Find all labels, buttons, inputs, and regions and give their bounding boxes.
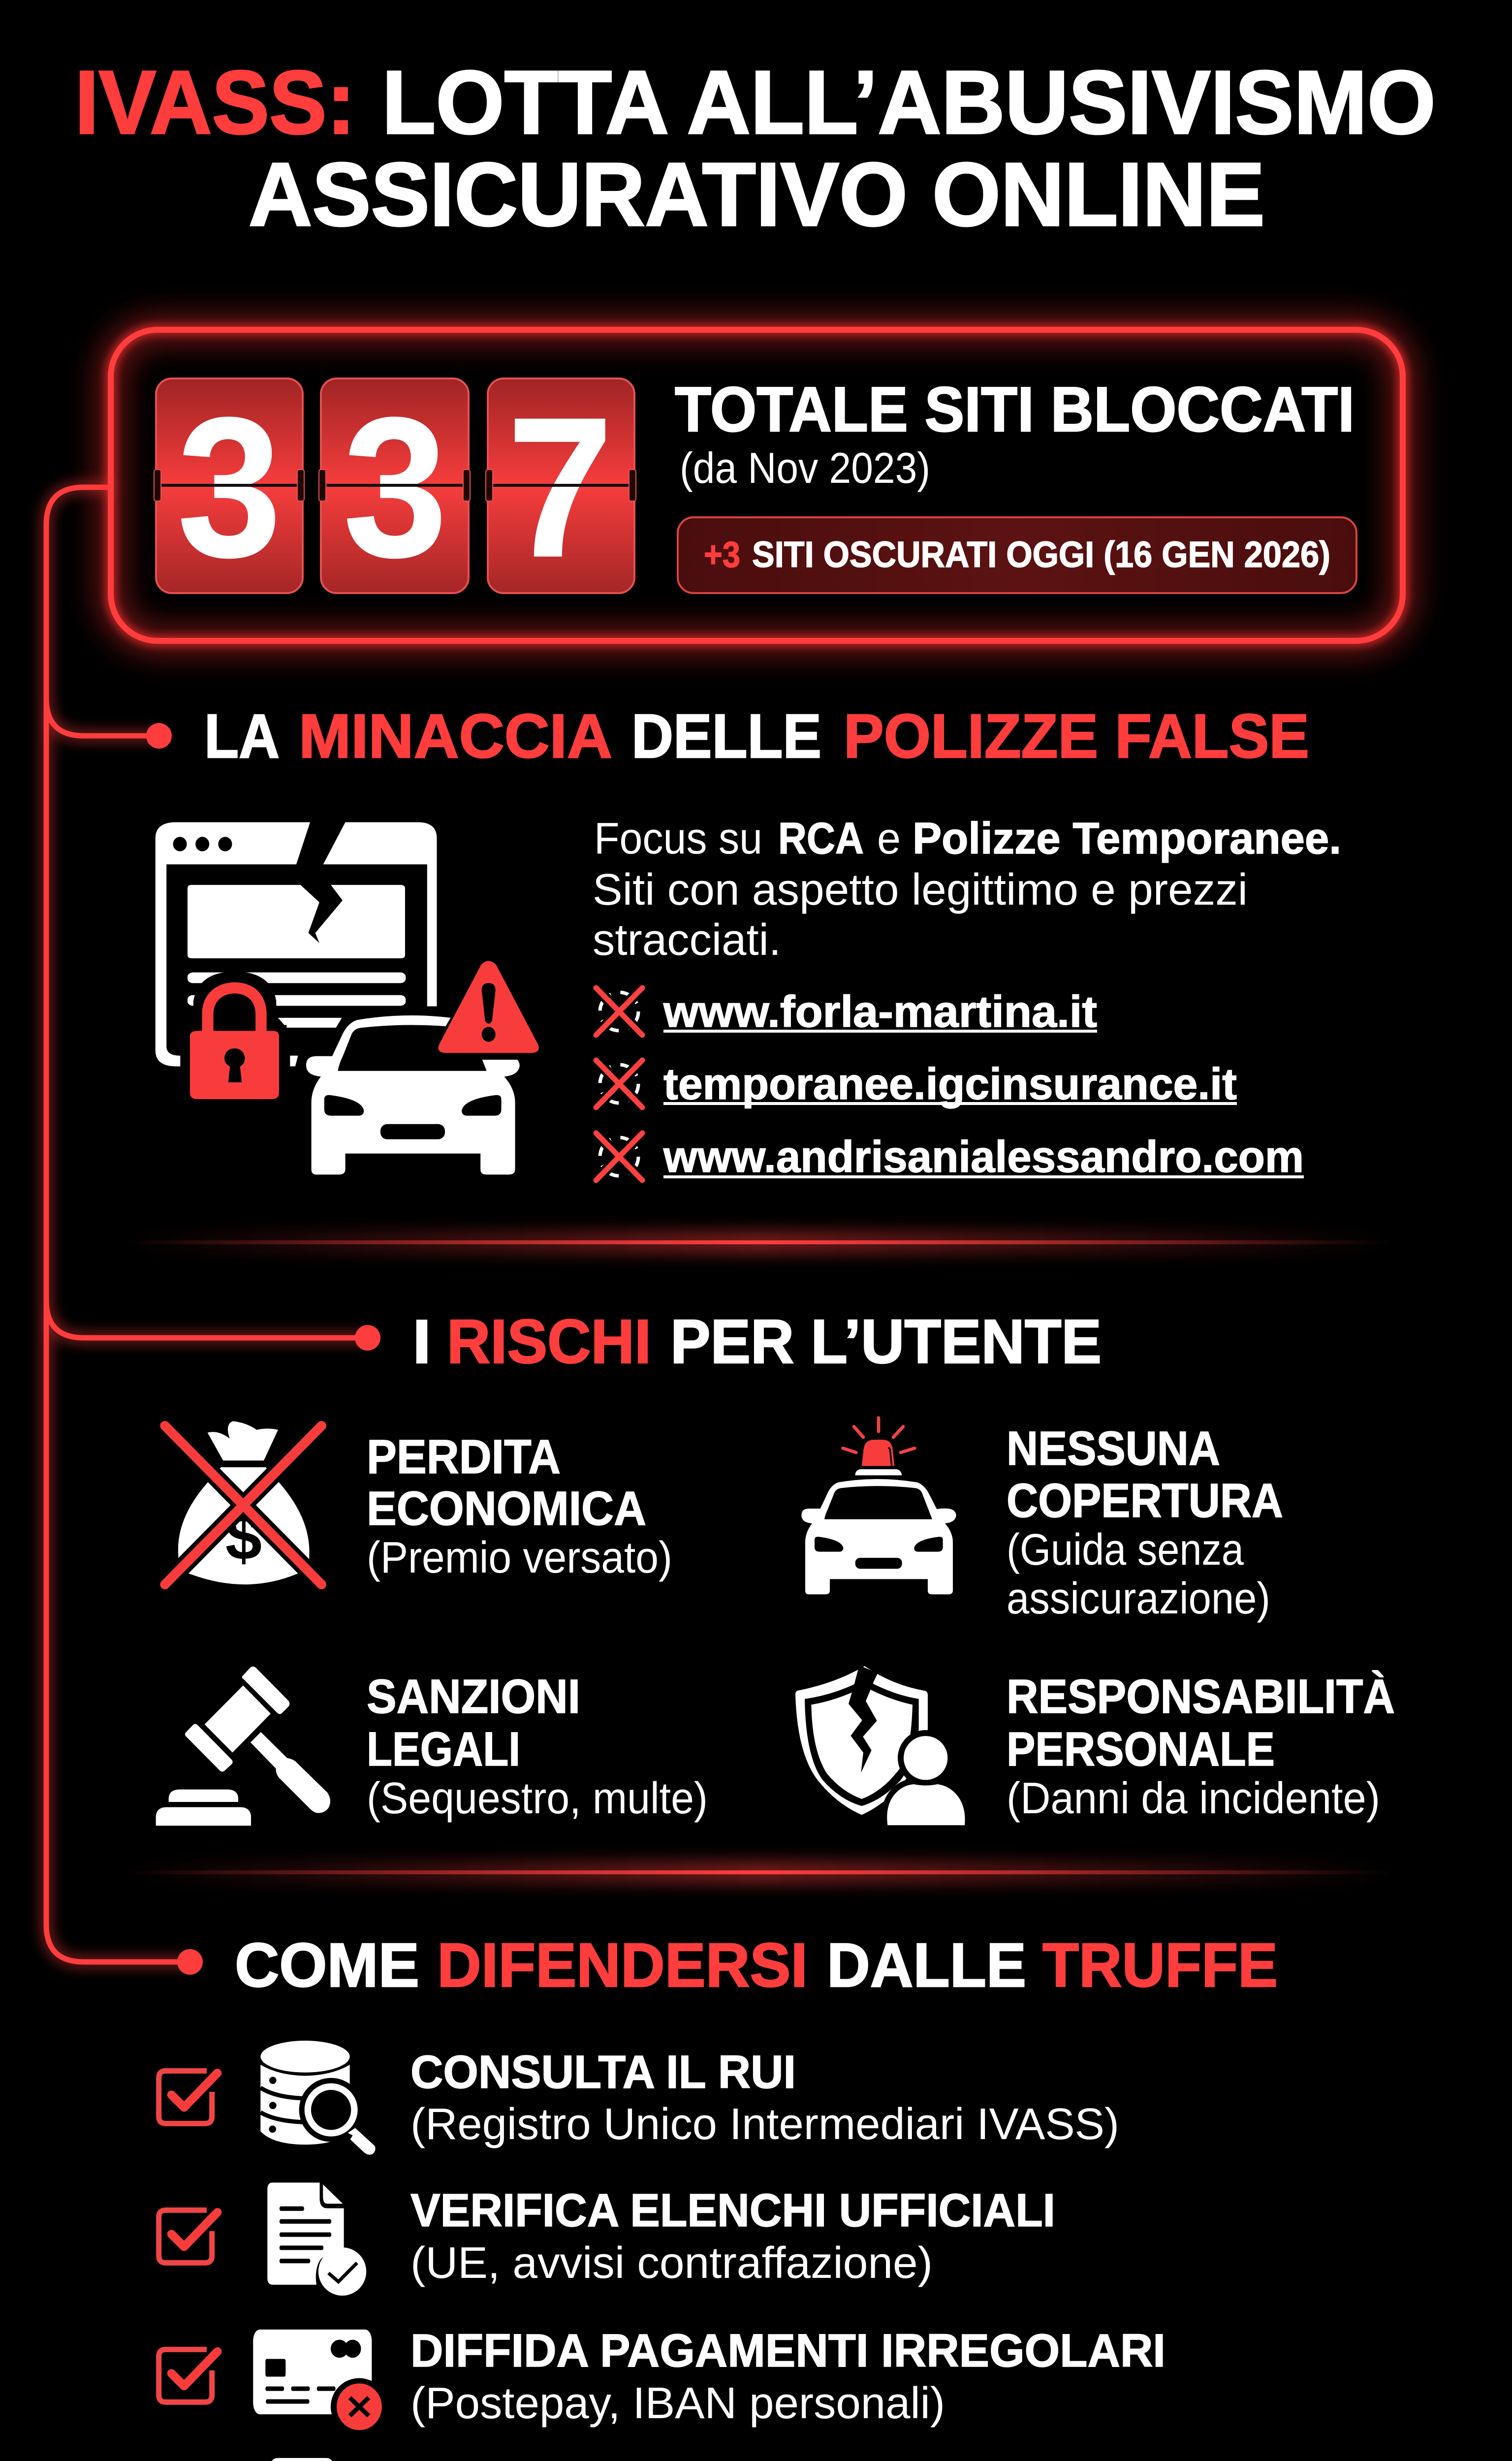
tip: diffida pagamenti irregolari: DIFFIDA PAGAMENTI IRREGOLARI — [410, 2325, 1166, 2377]
browser window — [156, 822, 437, 1066]
icon: phone with chat and cross — [270, 2458, 369, 2461]
pill: today's update — [678, 517, 1356, 593]
tip: evita contatti non ufficiali — [159, 2458, 1127, 2461]
title: IVASS: — [75, 52, 355, 153]
icon: credit card with cross — [253, 2330, 388, 2435]
risk: perdita economica: PERDITA — [367, 1430, 561, 1483]
risk: nessuna copertura: NESSUNA — [1007, 1421, 1220, 1475]
risk: perdita economica: (Premio versato) — [367, 1533, 672, 1582]
risk: responsabilita personale: RESPONSABILITÀ — [1007, 1670, 1395, 1723]
risk: responsabilita personale — [795, 1665, 1395, 1825]
risk: sanzioni legali: (Sequestro, multe) — [367, 1774, 708, 1823]
icon: red padlock — [183, 972, 286, 1105]
heading: come difendersi: DIFENDERSI — [437, 1930, 808, 2000]
blocked site 3: www.andrisanialessandro.com — [663, 1133, 1304, 1182]
connector line — [46, 487, 368, 1962]
risk: sanzioni legali: LEGALI — [367, 1722, 520, 1776]
risk: perdita economica — [165, 1421, 672, 1584]
risk: nessuna copertura: COPERTURA — [1007, 1474, 1283, 1527]
heading: i rischi: I — [412, 1307, 431, 1376]
panel subheading: (da Nov 2023) — [680, 443, 930, 492]
tip: diffida pagamenti irregolari — [159, 2325, 1166, 2435]
flip counter 337: 3 — [343, 376, 447, 599]
heading: come difendersi: TRUFFE — [1042, 1930, 1278, 2000]
icon: document with check — [267, 2182, 366, 2296]
text block: threat description: stracciati. — [593, 915, 781, 965]
pill: today's update: +3 — [704, 534, 740, 575]
heading: la minaccia: MINACCIA — [299, 701, 612, 771]
icon: checkbox — [159, 2349, 218, 2402]
title: LOTTA ALL’ABUSIVISMO — [382, 52, 1436, 153]
list: blocked sites — [596, 987, 1304, 1182]
risk: responsabilita personale: PERSONALE — [1007, 1722, 1275, 1776]
risk: nessuna copertura — [801, 1418, 1283, 1623]
risk: sanzioni legali: SANZIONI — [367, 1670, 580, 1723]
text block: threat description: Focus su — [594, 814, 762, 863]
text block: threat description: RCA — [778, 814, 864, 863]
flip counter 337: 3 — [177, 376, 282, 599]
text block: threat description: e — [877, 814, 901, 863]
icon: database and magnifier — [260, 2041, 376, 2155]
icon: crossed money bag: $ — [225, 1500, 262, 1574]
pill: today's update: SITI OSCURATI OGGI (16 GEN 2026) — [752, 534, 1330, 575]
risk: responsabilita personale: (Danni da incidente) — [1007, 1774, 1380, 1823]
blocked site 2: temporanee.igcinsurance.it — [663, 1060, 1237, 1109]
panel heading: TOTALE SITI BLOCCATI — [675, 374, 1354, 445]
risk: nessuna copertura: assicurazione) — [1007, 1574, 1270, 1623]
heading: come difendersi — [177, 1930, 1278, 2000]
text block: threat description: Siti con aspetto legittimo e prezzi — [593, 865, 1248, 915]
heading: come difendersi: COME — [235, 1930, 419, 2000]
heading: la minaccia: POLIZZE FALSE — [844, 701, 1309, 771]
icon: gavel — [156, 1667, 330, 1826]
panel: total blocked sites — [111, 330, 1403, 641]
tip: diffida pagamenti irregolari: (Postepay, IBAN personali) — [410, 2379, 945, 2428]
icon: crossed money bag — [165, 1421, 321, 1584]
heading: i rischi: PER L’UTENTE — [670, 1307, 1102, 1376]
heading: i rischi — [355, 1307, 1102, 1376]
risk: perdita economica: ECONOMICA — [367, 1482, 646, 1535]
blocked site 1: www.forla-martina.it — [663, 987, 1097, 1037]
tip: consulta il RUI — [159, 2041, 1119, 2155]
title: ASSICURATIVO ONLINE — [249, 144, 1265, 245]
tip: verifica elenchi ufficiali — [159, 2182, 1055, 2296]
flip counter 337 — [154, 376, 636, 599]
heading: come difendersi: DALLE — [827, 1930, 1026, 2000]
icon: checkbox — [159, 2071, 218, 2123]
tip: consulta il RUI: (Registro Unico Intermediari IVASS) — [410, 2100, 1119, 2149]
title — [75, 52, 1436, 245]
icon: broken shield and person — [795, 1665, 965, 1825]
heading: i rischi: RISCHI — [447, 1307, 651, 1376]
icon: police car with siren — [801, 1418, 956, 1594]
risk: sanzioni legali — [156, 1667, 708, 1826]
heading: la minaccia: LA — [204, 701, 280, 771]
text block: threat description: Polizze Temporanee. — [913, 814, 1341, 863]
flip counter 337: 7 — [507, 376, 613, 599]
tip: verifica elenchi ufficiali: (UE, avvisi contraffazione) — [410, 2239, 933, 2288]
tip: consulta il RUI: CONSULTA IL RUI — [410, 2046, 796, 2098]
icon: white car — [306, 1015, 520, 1174]
text block: threat description — [593, 814, 1341, 965]
heading: la minaccia — [146, 701, 1309, 771]
tip: verifica elenchi ufficiali: VERIFICA ELENCHI UFFICIALI — [410, 2184, 1055, 2237]
heading: la minaccia: DELLE — [631, 701, 821, 771]
risk: nessuna copertura: (Guida senza — [1007, 1525, 1244, 1575]
icon: checkbox — [159, 2210, 218, 2263]
icon: cracked browser, lock, car and warning — [156, 822, 551, 1174]
icon: warning triangle — [426, 951, 551, 1060]
